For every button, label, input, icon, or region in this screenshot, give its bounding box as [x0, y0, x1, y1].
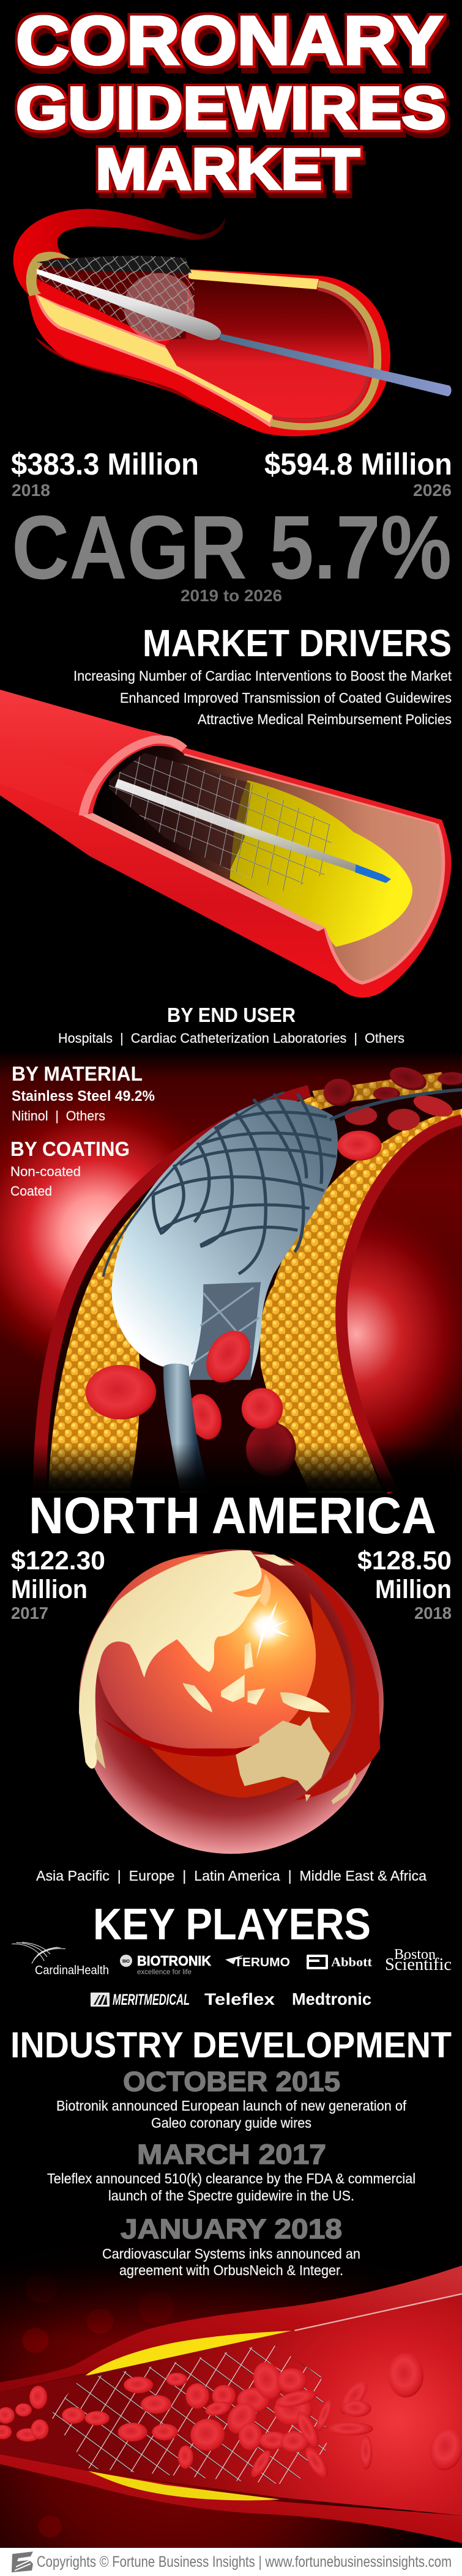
by material	[12, 1062, 155, 1123]
logo: Cardinal Health	[12, 1942, 109, 1977]
regional value 2017	[11, 1546, 105, 1623]
market drivers list: Attractive Medical Reimbursement Policies	[198, 711, 452, 727]
market value 2018: 2018	[12, 481, 50, 500]
logo: Merit Medical: MERITMEDICAL	[113, 1991, 190, 2008]
by material: Nitinol | Others	[12, 1108, 105, 1123]
market value 2018	[11, 447, 199, 500]
CAGR: 2019 to 2026	[181, 587, 282, 605]
january 2018 development: JANUARY 2018	[121, 2213, 342, 2245]
by coating: BY COATING	[10, 1138, 130, 1160]
march 2017 development: MARCH 2017	[137, 2139, 326, 2170]
illustration: stent balloon in artery with blood cells	[0, 1053, 462, 1492]
market drivers list: Increasing Number of Cardiac Interventions to Boost the Market	[73, 668, 452, 684]
march 2017 development: launch of the Spectre guidewire in the US.	[108, 2188, 354, 2204]
logo: Biotronik: excellence for life	[137, 1967, 192, 1976]
title: MARKET	[95, 137, 360, 202]
illustration: artery tube with stent and plaque	[0, 690, 452, 997]
january 2018 development: agreement with OrbusNeich & Integer.	[119, 2262, 343, 2278]
logo: Biotronik: BIOTRONIK	[137, 1953, 211, 1969]
logo: Boston Scientific: Scientific	[385, 1955, 452, 1974]
regional value 2018	[357, 1546, 452, 1623]
key players heading: KEY PLAYERS	[93, 1900, 371, 1949]
title	[16, 2, 446, 202]
logo: Terumo: TERUMO	[234, 1956, 290, 1969]
by material: Stainless Steel 49.2%	[12, 1088, 155, 1105]
logo: Boston Scientific: Boston	[394, 1947, 436, 1963]
by material: BY MATERIAL	[12, 1062, 143, 1085]
october 2015 development	[56, 2066, 407, 2131]
october 2015 development: Galeo coronary guide wires	[151, 2115, 311, 2131]
march 2017 development	[47, 2139, 415, 2204]
by coating	[10, 1138, 130, 1199]
market drivers list	[73, 668, 452, 727]
market value 2026: $594.8 Million	[264, 447, 452, 481]
market drivers list: Enhanced Improved Transmission of Coated Guidewires	[120, 690, 452, 706]
logo: Biotronik: BIO	[122, 1960, 130, 1964]
logo: Boston Scientific	[385, 1947, 452, 1974]
bottom illustration: stented artery with red blood cells	[0, 2224, 462, 2548]
logo: Abbott	[308, 1955, 372, 1969]
north america heading: NORTH AMERICA	[29, 1487, 436, 1544]
by coating: Coated	[10, 1183, 52, 1199]
regional value 2017: Million	[11, 1575, 88, 1604]
regional value 2017: 2017	[11, 1604, 48, 1623]
market value 2026	[264, 447, 452, 500]
end user segments: Hospitals | Cardiac Catheterization Laboratories | Others	[58, 1031, 404, 1046]
logo: Teleflex: Teleflex	[204, 1990, 275, 2008]
october 2015 development: Biotronik announced European launch of new generation of	[56, 2098, 407, 2114]
footer	[0, 2548, 462, 2576]
title: GUIDEWIRES	[16, 75, 446, 141]
regional value 2018: Million	[375, 1575, 452, 1604]
illustration: stent in artery cross-section	[13, 209, 452, 436]
title: CORONARY	[16, 2, 443, 79]
regional value 2017: $122.30	[11, 1546, 105, 1575]
logo: Merit Medical	[91, 1991, 190, 2008]
regional value 2018: 2018	[414, 1604, 452, 1623]
march 2017 development: Teleflex announced 510(k) clearance by the FDA & commercial	[47, 2171, 415, 2186]
market value 2018: $383.3 Million	[11, 447, 199, 481]
january 2018 development: Cardiovascular Systems inks announced an	[102, 2246, 360, 2262]
logo: Abbott: Abbott	[331, 1955, 372, 1969]
logo: Cardinal Health: CardinalHealth	[35, 1964, 109, 1977]
by coating: Non-coated	[10, 1164, 81, 1179]
october 2015 development: OCTOBER 2015	[123, 2066, 340, 2097]
january 2018 development	[102, 2213, 360, 2278]
regional value 2018: $128.50	[357, 1546, 452, 1575]
globe	[79, 1549, 384, 1854]
logo: Medtronic: Medtronic	[292, 1989, 371, 2008]
market value 2026: 2026	[413, 481, 452, 500]
other regions: Asia Pacific | Europe | Latin America | Middle East & Africa	[36, 1868, 427, 1884]
logo: Biotronik	[120, 1953, 211, 1976]
by end user heading: BY END USER	[167, 1004, 296, 1026]
